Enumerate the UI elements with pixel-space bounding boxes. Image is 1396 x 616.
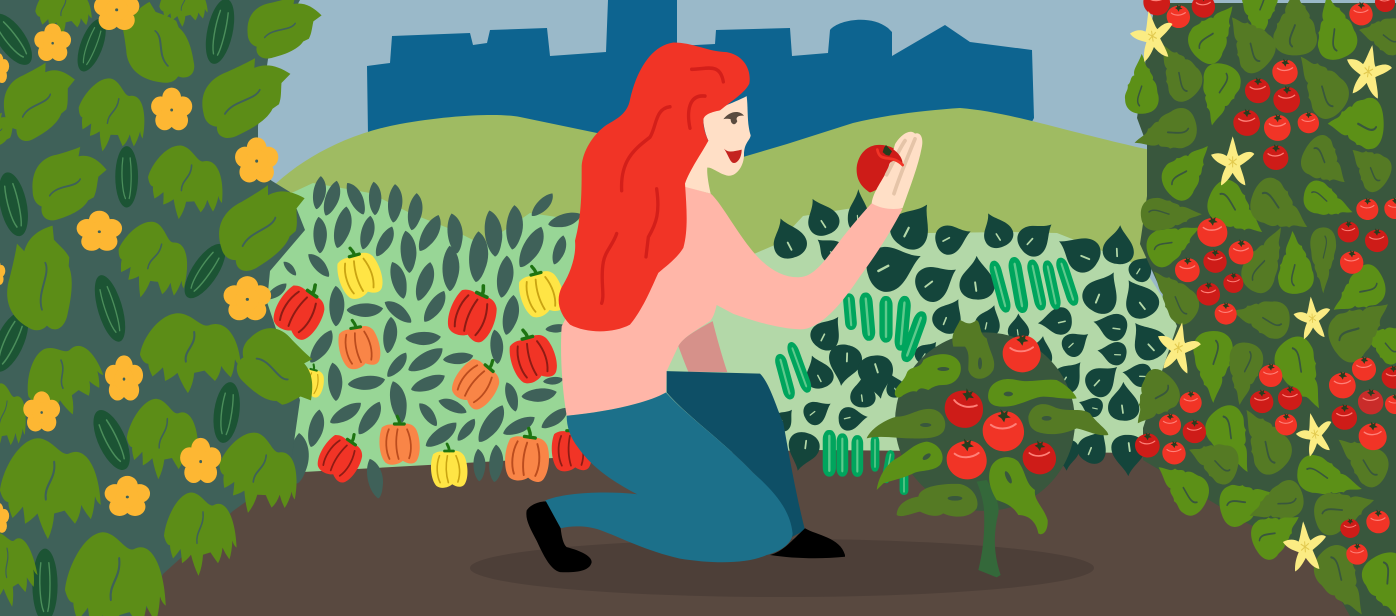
front leg bbox=[545, 392, 793, 562]
seedling field backdrop bbox=[260, 183, 640, 480]
tree foliage backdrop bbox=[895, 332, 1075, 511]
picked tomato bbox=[857, 145, 902, 192]
panel: cucumber vine wall (left) bbox=[0, 0, 328, 616]
lips bbox=[724, 149, 742, 163]
cucumber leaves bbox=[0, 0, 328, 616]
green bean rows bbox=[773, 256, 1081, 495]
vine blossoms bbox=[1127, 7, 1395, 573]
ground shadow bbox=[470, 539, 1094, 597]
tree tomatoes bbox=[940, 334, 1056, 479]
dark leaves pattern bbox=[765, 189, 1173, 476]
neck and face bbox=[683, 96, 751, 194]
front shoe bbox=[770, 528, 845, 558]
squash blossoms bbox=[0, 0, 278, 533]
eye and brow bbox=[723, 112, 744, 124]
soil ground bbox=[0, 450, 1396, 616]
vine wall backdrop bbox=[0, 0, 305, 616]
long red hair bbox=[559, 42, 750, 331]
torso and arm bbox=[561, 186, 903, 416]
vine leaves bbox=[1122, 0, 1396, 616]
cucumbers bbox=[0, 0, 244, 616]
bell peppers bbox=[267, 242, 592, 488]
vine tomatoes bbox=[1135, 0, 1396, 565]
back leg bbox=[667, 371, 805, 537]
back shoe bbox=[526, 501, 592, 572]
rolling green hills bbox=[260, 108, 1150, 470]
tree trunk bbox=[977, 480, 1001, 577]
tree leaves bbox=[867, 320, 1108, 534]
tomato plant bbox=[867, 320, 1108, 577]
leafy field backdrop bbox=[640, 208, 1190, 470]
vine wall backdrop bbox=[1137, 3, 1396, 616]
seedling leaves pattern bbox=[264, 176, 583, 500]
city skyline silhouette bbox=[367, 0, 1034, 180]
panel: tomato vine wall (right) bbox=[1122, 0, 1396, 616]
leg shadow bbox=[678, 321, 727, 372]
woman kneeling bbox=[526, 42, 922, 572]
hair strands bbox=[602, 68, 723, 303]
hand bbox=[872, 132, 922, 209]
